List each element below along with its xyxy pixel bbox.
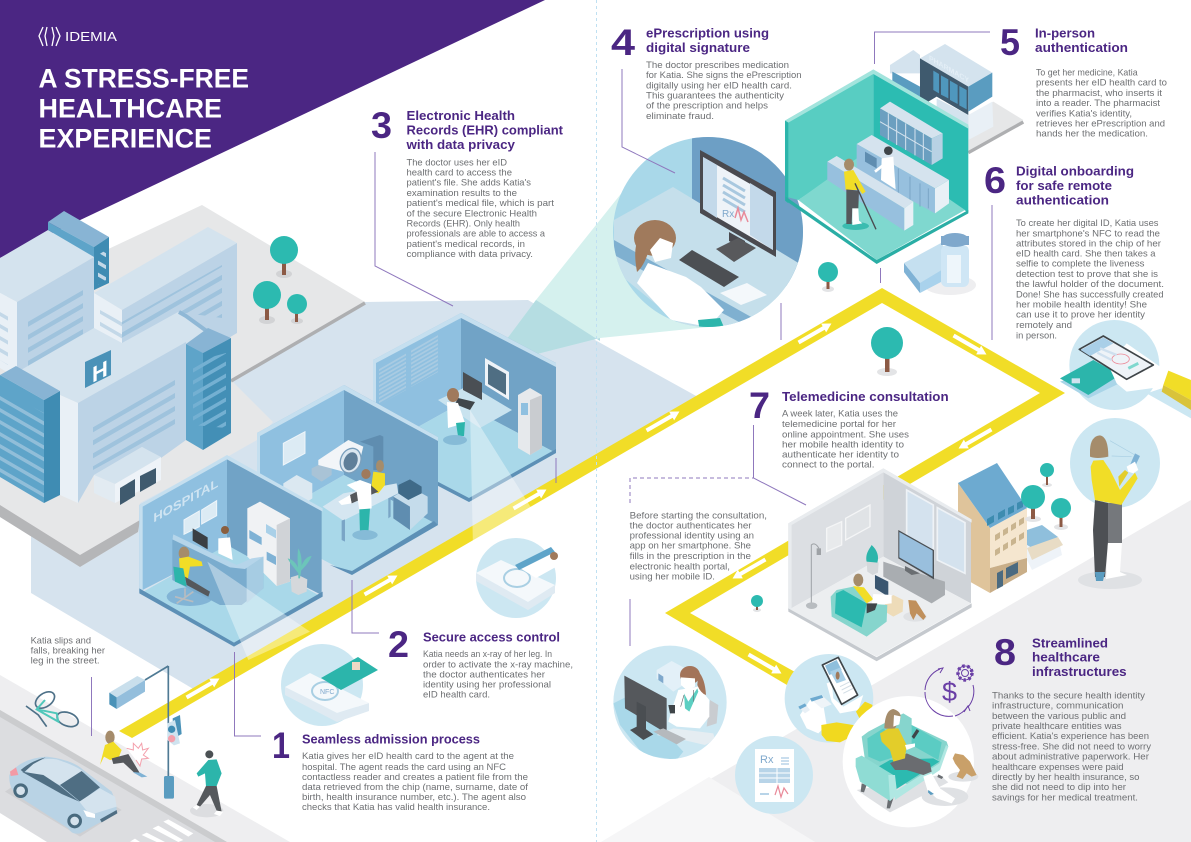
step 3: electronic health records: compliance with data privacy. bbox=[406, 249, 533, 259]
step 8: streamlined healthcare infrastructures: healthcare expenses were paid bbox=[992, 762, 1124, 772]
circle: smartphone NFC reading bbox=[1060, 320, 1191, 418]
step 6: digital onboarding: authentication bbox=[1016, 192, 1109, 208]
step 7: telemedicine consultation: her mobile health identity to bbox=[782, 439, 904, 449]
step 3: electronic health records: professionals are able to access a bbox=[406, 229, 546, 239]
Katia fallen on the sidewalk bbox=[100, 731, 148, 777]
step 6: digital onboarding: her smartphone's NFC to read the bbox=[1016, 228, 1160, 238]
Katia with crutch bbox=[842, 159, 876, 230]
step 5: in-person authentication: authentication bbox=[1035, 40, 1128, 55]
step 6: digital onboarding bbox=[984, 160, 1164, 340]
step 1: seamless admission process: Katia gives her eID health card to the agent at the bbox=[302, 751, 514, 761]
step 5: in-person authentication: hands her the medication. bbox=[1036, 129, 1148, 139]
step 7: telemedicine consultation: authenticate her identity to bbox=[782, 450, 899, 460]
step 5: in-person authentication: 5 bbox=[1000, 22, 1020, 63]
icon: money and gear cycle: $ bbox=[942, 677, 957, 707]
step 1: seamless admission process: hospital. The agent reads the card using an NFC bbox=[302, 762, 506, 772]
step 3: electronic health records: Records (EHR) compliant bbox=[406, 122, 564, 138]
back counter bbox=[857, 135, 949, 213]
title text: HEALTHCARE bbox=[38, 94, 222, 124]
step 5: in-person authentication: retrieves her ePrescription and bbox=[1036, 119, 1165, 129]
pharmacy building bbox=[890, 44, 1023, 153]
yellow pathway bbox=[119, 288, 1065, 738]
step 1: seamless admission process: checks that Katia has valid health insurance. bbox=[302, 802, 490, 812]
text: Katia slips: Katia slips and bbox=[31, 636, 91, 646]
step 6: digital onboarding: detection test to prove that she is bbox=[1016, 269, 1158, 279]
step 2: secure access control: 2 bbox=[388, 624, 409, 665]
step 2: secure access control: Secure access control bbox=[423, 630, 560, 644]
step 8: streamlined healthcare infrastructures: between the various public and bbox=[992, 711, 1126, 721]
trees bbox=[253, 236, 903, 612]
step 3: electronic health records: The doctor uses her eID bbox=[406, 157, 507, 167]
step 1: seamless admission process: data retrieved from the chip (name, surname, date of bbox=[302, 782, 528, 792]
step 3: electronic health records: examination results to the bbox=[406, 188, 517, 198]
step 7: telemedicine consultation: Telemedicine consultation bbox=[782, 389, 949, 404]
step 8: streamlined healthcare infrastructures: efficient. Katia's experience has been bbox=[992, 731, 1149, 741]
text: doctor consultation note: fills in the prescription in the bbox=[630, 551, 751, 561]
purple header triangle bbox=[0, 0, 545, 258]
step 3: electronic health records bbox=[371, 105, 564, 259]
text: Katia slips: leg in the street. bbox=[31, 656, 100, 666]
card reader circle step 2 bbox=[476, 538, 572, 618]
step 4: ePrescription: ePrescription using bbox=[646, 26, 769, 40]
annex block bbox=[94, 447, 161, 505]
step 8: streamlined healthcare infrastructures: savings for her medical treatment. bbox=[992, 792, 1138, 802]
step 7: telemedicine consultation: telemedicine portal for her bbox=[782, 419, 896, 429]
house and shop bbox=[958, 463, 1071, 593]
step 4: ePrescription: of the prescription and helps bbox=[646, 101, 768, 111]
hospital H sign: H bbox=[92, 355, 108, 388]
background: teal light beam from room 3 to prescription circle bbox=[486, 170, 709, 367]
step 7: telemedicine consultation: 7 bbox=[749, 385, 770, 426]
step 6: digital onboarding: attributes stored in the chip of her bbox=[1016, 238, 1161, 248]
room 2: x-ray room with secure access bbox=[257, 385, 438, 575]
car bbox=[5, 757, 122, 837]
step 4: ePrescription: 4 bbox=[611, 22, 635, 63]
step 3: electronic health records: patient's medical file, which is part bbox=[406, 198, 554, 208]
step 8: streamlined healthcare infrastructures: 8 bbox=[994, 632, 1016, 673]
room 3: electronic health records office bbox=[373, 313, 556, 502]
right blue tower bbox=[186, 328, 231, 450]
background: pale blue hospital ground bbox=[31, 300, 698, 690]
text: Katia slips: falls, breaking her bbox=[31, 646, 105, 656]
logo: IDEMIA bbox=[65, 29, 117, 44]
step 8: streamlined healthcare infrastructures: she did not need to dip into her bbox=[992, 782, 1126, 792]
step 5: in-person authentication: In-person bbox=[1035, 26, 1095, 40]
circle: phone with prescription app bbox=[785, 654, 873, 743]
title text bbox=[38, 64, 249, 154]
step 7: telemedicine consultation bbox=[749, 385, 949, 470]
medicine shelves bbox=[880, 102, 943, 165]
step 7: telemedicine consultation: online appointment. She uses bbox=[782, 429, 909, 439]
step 1: seamless admission process: birth, health insurance number, etc.). The agent also bbox=[302, 792, 526, 802]
step 6: digital onboarding: for safe remote bbox=[1016, 178, 1112, 193]
step 3: electronic health records: with data privacy bbox=[405, 137, 516, 152]
card reader circle step 1: NFC bbox=[320, 689, 334, 696]
hospital wall lettering: HOSPITAL bbox=[153, 475, 218, 525]
step 2: secure access control: eID health card. bbox=[423, 690, 490, 700]
pharmacist bbox=[875, 146, 896, 189]
title text: A STRESS-FREE bbox=[38, 64, 249, 94]
step 8: streamlined healthcare infrastructures: about administrative paperwork. Her bbox=[992, 752, 1149, 762]
living room with Katia on telemedicine call bbox=[788, 468, 972, 661]
step 8: streamlined healthcare infrastructures: infrastructures bbox=[1032, 664, 1127, 679]
text: Katia slips bbox=[31, 636, 105, 666]
step 8: streamlined healthcare infrastructures: private healthcare entities was bbox=[992, 721, 1122, 731]
step 6: digital onboarding: the lawful holder of the document. bbox=[1016, 279, 1164, 289]
x-ray equipment and people bbox=[283, 432, 428, 542]
street lamp, sign and traffic light bbox=[109, 666, 182, 799]
step 4: ePrescription: digitally using her eID health card. bbox=[646, 80, 792, 90]
beam from room 3 to access control circle bbox=[470, 410, 545, 548]
step 1: seamless admission process: contactless reader and creates a patient file from the bbox=[302, 772, 528, 782]
fallen bicycle bbox=[26, 688, 80, 729]
step 2: secure access control: identity using her professional bbox=[423, 680, 551, 690]
step 1: seamless admission process: Seamless admission process bbox=[302, 732, 480, 746]
rooftop blue block bbox=[48, 211, 109, 290]
building back block bbox=[94, 227, 237, 355]
front counter bbox=[827, 156, 913, 231]
white pathway arrows bbox=[184, 319, 994, 702]
central block bbox=[0, 312, 208, 503]
circle: doctor signing ePrescription: Rx bbox=[722, 209, 734, 220]
step 6: digital onboarding: eID health card. She then takes a bbox=[1016, 249, 1156, 259]
circle: doctor signing ePrescription bbox=[613, 137, 803, 327]
step 8: streamlined healthcare infrastructures: Streamlined bbox=[1032, 636, 1108, 650]
step 3: electronic health records: of the secure Electronic Health bbox=[406, 208, 537, 218]
title text: EXPERIENCE bbox=[38, 124, 212, 154]
left blue tower bbox=[0, 366, 60, 503]
step 5: in-person authentication: verifies Katia's identity, bbox=[1036, 108, 1132, 118]
circle: prescription document: Rx bbox=[760, 754, 774, 766]
step 4: ePrescription: This guarantees the authenticity bbox=[646, 91, 784, 101]
medicine bottle and box bbox=[904, 233, 976, 295]
step 6: digital onboarding: Digital onboarding bbox=[1016, 164, 1134, 178]
circle: doctor authenticating on smartphone bbox=[610, 645, 730, 760]
step 6: digital onboarding: in person. bbox=[1016, 330, 1057, 340]
step 8: streamlined healthcare infrastructures: directly by her health insurance, so bbox=[992, 772, 1140, 782]
step 8: streamlined healthcare infrastructures bbox=[992, 632, 1151, 802]
street and sidewalk bbox=[0, 675, 290, 842]
step 2: secure access control: order to activate the x-ray machine, bbox=[423, 659, 573, 669]
step 6: digital onboarding: Done! She has successfully created bbox=[1016, 289, 1164, 299]
step 5: in-person authentication: presents her eID health card to bbox=[1036, 78, 1167, 88]
circle: woman taking a selfie bbox=[1070, 418, 1160, 589]
text: doctor consultation note: the doctor authenticates her bbox=[630, 521, 752, 531]
step 3: electronic health records: Records (EHR). Only health bbox=[406, 218, 520, 228]
step 5: in-person authentication bbox=[1000, 22, 1167, 139]
card reader circle step 1 bbox=[281, 644, 378, 726]
step 4: ePrescription: for Katia. She signs the ePrescription bbox=[646, 70, 802, 80]
step 4: ePrescription bbox=[611, 22, 802, 121]
step 7: telemedicine consultation: A week later, Katia uses the bbox=[782, 409, 898, 419]
step 1: seamless admission process: 1 bbox=[272, 725, 290, 766]
step 3: electronic health records: patient's file. She adds Katia's bbox=[406, 178, 531, 188]
step 7: telemedicine consultation: connect to the portal. bbox=[782, 460, 874, 470]
step 6: digital onboarding: To create her digital ID, Katia uses bbox=[1016, 218, 1159, 228]
step 5: in-person authentication: To get her medicine, Katia bbox=[1036, 68, 1138, 78]
step 1: seamless admission process bbox=[272, 725, 528, 812]
step 8: streamlined healthcare infrastructures: healthcare bbox=[1032, 650, 1100, 664]
background: lower right grey area bbox=[595, 500, 1191, 842]
text: doctor consultation note: professional identity using an bbox=[630, 531, 754, 541]
step 6: digital onboarding: selfie to complete the liveness bbox=[1016, 259, 1145, 269]
hospital H sign bbox=[85, 350, 111, 388]
step 2: secure access control: the doctor authenticates her bbox=[423, 669, 545, 679]
step 3: electronic health records: Electronic Health bbox=[406, 108, 515, 123]
pharmacy building: PHARMACY bbox=[929, 54, 970, 85]
room 1: hospital reception bbox=[139, 455, 323, 660]
main title and logo bbox=[38, 27, 249, 154]
step 3: electronic health records: patient's medical records, in bbox=[406, 239, 525, 249]
circle: prescription document bbox=[735, 736, 813, 814]
hospital building bbox=[0, 211, 237, 505]
step 6: digital onboarding: 6 bbox=[984, 160, 1006, 201]
circle: Katia relaxing on sofa with dog bbox=[843, 696, 978, 827]
building left block bbox=[0, 230, 94, 378]
step 6: digital onboarding: remotely and bbox=[1016, 320, 1072, 330]
step 2: secure access control: Katia needs an x-ray of her leg. In bbox=[423, 649, 552, 659]
step 6: digital onboarding: can use it to prove her identity bbox=[1016, 310, 1145, 320]
connector lines bbox=[92, 32, 992, 736]
step 8: streamlined healthcare infrastructures: infrastructure, communication bbox=[992, 701, 1124, 711]
plateau: grey hospital ground slab bbox=[0, 205, 365, 567]
step 5: in-person authentication: into a reader. The pharmacist bbox=[1036, 98, 1160, 108]
step 2: secure access control bbox=[388, 624, 573, 700]
pedestrian walking bbox=[190, 750, 223, 817]
step 4: ePrescription: digital signature bbox=[646, 40, 750, 55]
dog bbox=[903, 600, 927, 622]
step 6: digital onboarding: her mobile health identity! She bbox=[1016, 299, 1147, 309]
text: doctor consultation note: Before starting the consultation, bbox=[630, 510, 767, 520]
spread fold dashed line bbox=[596, 0, 598, 842]
text: doctor consultation note: electronic health portal, bbox=[630, 561, 730, 571]
step 4: ePrescription: The doctor prescribes medication bbox=[646, 60, 789, 70]
step 5: in-person authentication: the pharmacist, who inserts it bbox=[1036, 88, 1162, 98]
pharmacy interior room bbox=[785, 69, 968, 264]
text: doctor consultation note bbox=[630, 510, 767, 582]
logo bbox=[39, 27, 117, 46]
step 8: streamlined healthcare infrastructures: Thanks to the secure health identity bbox=[992, 690, 1145, 700]
step 3: electronic health records: health card to access the bbox=[406, 168, 512, 178]
step 4: ePrescription: eliminate fraud. bbox=[646, 111, 714, 121]
text: doctor consultation note: using her mobile ID. bbox=[630, 572, 715, 582]
step 8: streamlined healthcare infrastructures: stress-free. She did not need to worry bbox=[992, 741, 1151, 751]
icon: money and gear cycle bbox=[925, 666, 974, 716]
step 3: electronic health records: 3 bbox=[371, 105, 392, 146]
text: doctor consultation note: app on her smartphone. She bbox=[630, 541, 751, 551]
